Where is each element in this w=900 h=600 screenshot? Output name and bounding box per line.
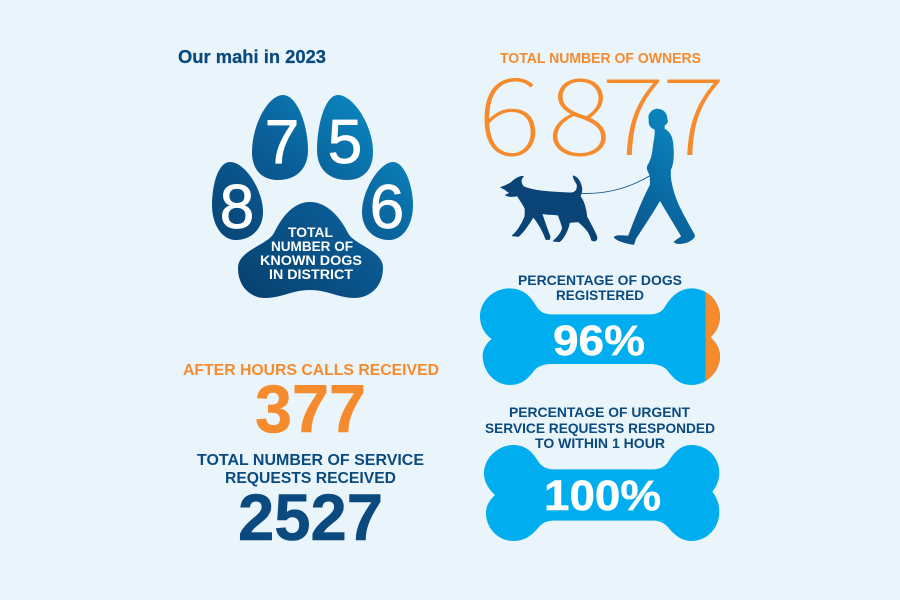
heading: percentage of dogs registered <box>518 272 682 303</box>
paw main pad: IN DISTRICT <box>269 267 354 282</box>
heading: percentage of dogs registered: REGISTERED <box>556 287 644 303</box>
paw toe: 6: 6 <box>370 173 404 242</box>
bone gauge: 96% <box>480 288 720 385</box>
heading: percentage of dogs registered: PERCENTAGE OF DOGS <box>518 272 682 288</box>
paw main pad <box>238 202 383 298</box>
value: 100%: 100% <box>544 472 661 520</box>
paw toe: 7 <box>252 95 308 180</box>
heading: percentage of urgent service requests: SERVICE REQUESTS RESPONDED <box>485 420 715 436</box>
heading: total service requests: TOTAL NUMBER OF SERVICE <box>197 452 424 469</box>
paw toe: 5: 5 <box>328 108 362 177</box>
title: Our mahi in 2023 <box>178 47 326 67</box>
value: 96%: 96% <box>553 317 645 365</box>
paw main pad: NUMBER OF <box>271 239 353 254</box>
paw toe: 8 <box>212 162 263 242</box>
heading: percentage of urgent service requests <box>485 404 715 451</box>
person silhouette <box>614 109 694 244</box>
number: 2527: 2527 <box>238 480 383 554</box>
paw print: total number of known dogs <box>212 95 413 298</box>
heading: total service requests: REQUESTS RECEIVED <box>225 470 396 487</box>
heading: percentage of urgent service requests: TO WITHIN 1 HOUR <box>535 435 665 451</box>
bone gauge: 100% <box>484 445 719 541</box>
paw toe: 8: 8 <box>220 173 254 242</box>
paw toe: 6 <box>362 162 413 242</box>
paw main pad: KNOWN DOGS <box>260 253 362 268</box>
paw toe: 5 <box>317 95 373 180</box>
dog silhouette <box>501 176 597 242</box>
big thin number: 6877: 6877 <box>477 34 725 185</box>
heading: after hours calls: AFTER HOURS CALLS RECEIVED <box>183 362 439 379</box>
paw toe: 7: 7 <box>265 108 299 177</box>
number: 377: 377 <box>255 371 366 447</box>
paw main pad: TOTAL <box>288 225 333 240</box>
illustration: person walking dog <box>501 109 694 244</box>
heading: total service requests <box>197 452 424 487</box>
bone shape <box>480 288 720 385</box>
heading: percentage of urgent service requests: PERCENTAGE OF URGENT <box>509 404 690 420</box>
heading: total number of owners: TOTAL NUMBER OF OWNERS <box>500 51 701 67</box>
orange remainder <box>706 292 720 382</box>
leash <box>582 176 650 193</box>
